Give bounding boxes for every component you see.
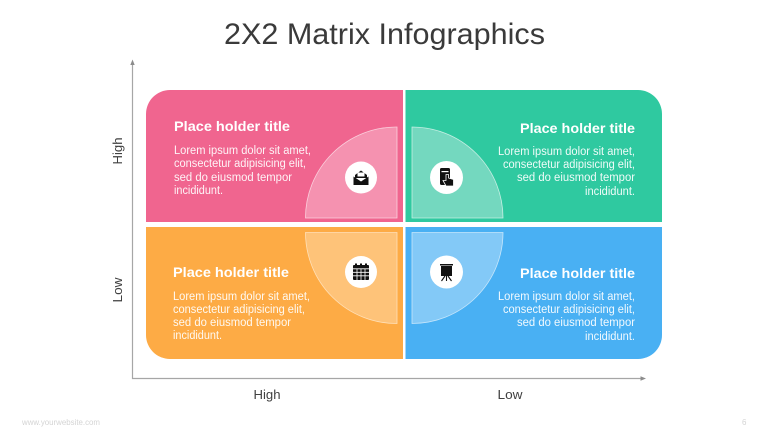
- text block: pink: Lorem ipsum dolor sit amet,: [174, 145, 311, 157]
- quarter circle: blue: [412, 232, 503, 324]
- heading: pink: Place holder title: [174, 118, 290, 134]
- panel: top right green: [406, 90, 662, 222]
- text block: pink: incididunt.: [174, 185, 223, 197]
- panel: top left pink: [146, 90, 403, 222]
- y axis label: low: Low: [111, 276, 125, 302]
- text block: blue: consectetur adipisicing elit,: [503, 304, 635, 316]
- text block: green: [498, 146, 635, 198]
- text block: green: incididunt.: [585, 186, 635, 198]
- quarter circle: orange: [306, 232, 397, 324]
- y axis label: high: High: [111, 137, 125, 164]
- text block: orange: sed do eiusmod tempor: [173, 317, 291, 329]
- text block: orange: [173, 291, 310, 342]
- heading: blue: Place holder title: [520, 265, 635, 281]
- panel: bottom right blue: [406, 227, 662, 359]
- text block: orange: consectetur adipisicing elit,: [173, 304, 305, 316]
- quarter circle: green: [412, 127, 503, 218]
- icon: presentation board: [430, 256, 463, 288]
- text block: orange: Lorem ipsum dolor sit amet,: [173, 291, 310, 303]
- text block: green: sed do eiusmod tempor: [517, 172, 635, 184]
- text block: pink: [174, 145, 311, 197]
- panel: bottom left orange: [146, 227, 403, 359]
- heading: green: Place holder title: [520, 120, 635, 136]
- page number: 6: [742, 418, 747, 427]
- text block: pink: sed do eiusmod tempor: [174, 172, 292, 184]
- footer website: www.yourwebsite.com: [21, 418, 100, 427]
- x axis label: high: High: [254, 388, 281, 402]
- text block: green: consectetur adipisicing elit,: [503, 159, 635, 171]
- text block: blue: [498, 291, 635, 343]
- text block: pink: consectetur adipisicing elit,: [174, 158, 306, 170]
- heading: orange: Place holder title: [173, 264, 289, 280]
- text block: green: Lorem ipsum dolor sit amet,: [498, 146, 635, 158]
- text block: orange: incididunt.: [173, 330, 222, 342]
- text block: blue: Lorem ipsum dolor sit amet,: [498, 291, 635, 303]
- text block: blue: sed do eiusmod tempor: [517, 317, 635, 329]
- icon: calendar: [345, 256, 377, 288]
- axes: [130, 60, 646, 381]
- x axis label: low: Low: [498, 388, 524, 402]
- icon: envelope: [345, 162, 377, 194]
- quarter circle: pink: [306, 127, 397, 218]
- title: 2X2 Matrix Infographics: [224, 18, 545, 51]
- text block: blue: incididunt.: [585, 331, 635, 343]
- icon: hand on phone: [430, 161, 463, 194]
